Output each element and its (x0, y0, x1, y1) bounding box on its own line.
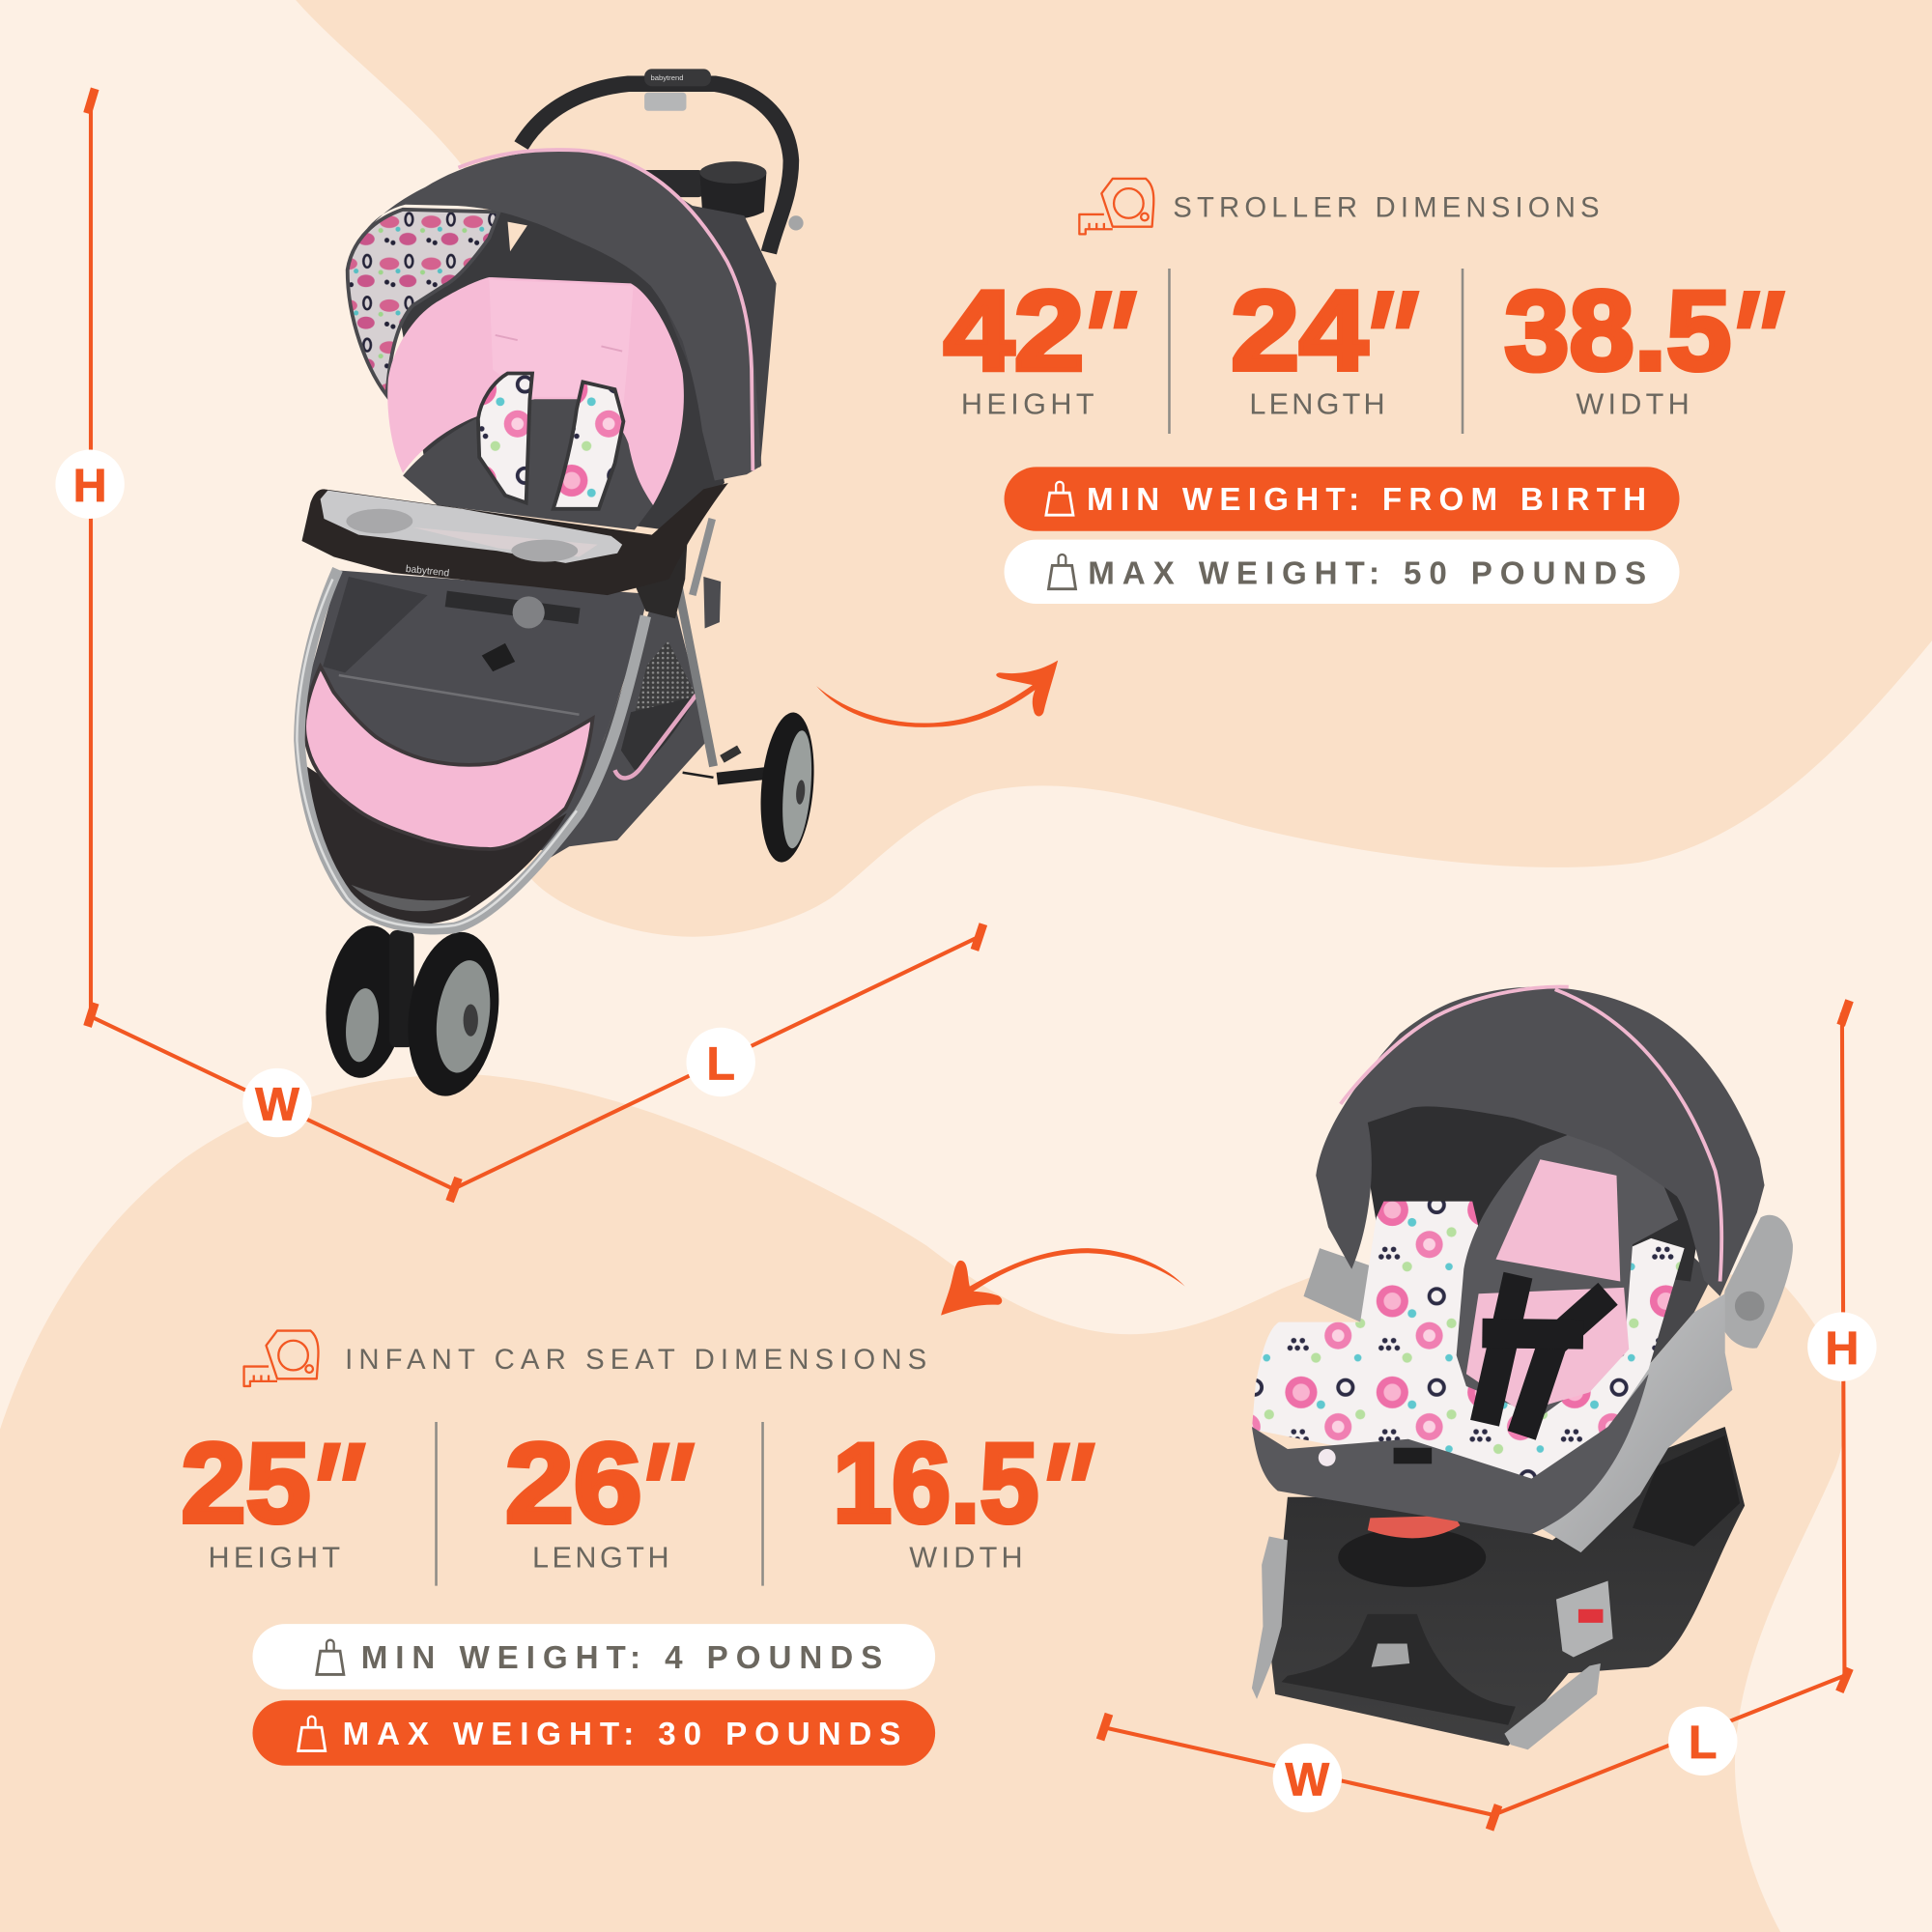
label: W: W (255, 1078, 299, 1130)
label: H (1807, 1312, 1877, 1381)
lower footwell lighter band (352, 885, 470, 911)
label: W (1273, 1744, 1342, 1812)
front gray cushion (1252, 1374, 1649, 1534)
canopy interior (1355, 1091, 1707, 1282)
stat: width: " (1705, 260, 1801, 424)
stat: height: 42 (944, 269, 1084, 394)
icon: tape measure (244, 1331, 319, 1386)
front wheels (319, 922, 509, 1102)
base (1271, 1427, 1745, 1746)
section: car seat dimensions (182, 1331, 1110, 1766)
stroller photo illustration (296, 69, 820, 1102)
left latch (1252, 1537, 1288, 1699)
floral seat liner (1252, 1202, 1685, 1485)
tray joint (635, 536, 688, 618)
stat: length: 24 (1231, 267, 1368, 394)
under-seat footwell (303, 764, 567, 924)
floral shoulder pad left (478, 373, 532, 502)
carrier silver side (1540, 1293, 1732, 1552)
stat: length: " (615, 1411, 710, 1577)
label: W (242, 1068, 312, 1137)
pill: maximum weight: MAX WEIGHT: 50 POUNDS (1088, 556, 1646, 592)
gray bolster (1457, 1133, 1678, 1417)
seat lower bucket (296, 571, 648, 850)
harness (1482, 1275, 1608, 1435)
pill: maximum weight (1005, 540, 1680, 604)
seat back dark (403, 397, 653, 529)
car seat canopy (1316, 987, 1765, 1296)
stroller dimension lines (55, 89, 983, 1202)
seat interior (401, 207, 724, 529)
rear wheel (755, 710, 820, 865)
tray (301, 483, 728, 595)
rear leg tube (676, 577, 714, 766)
pink seat back (1466, 1159, 1629, 1412)
pill: minimum weight (252, 1624, 935, 1690)
stat: height: HEIGHT (961, 388, 1094, 421)
canopy rear panel (640, 173, 777, 474)
pill: maximum weight (252, 1700, 935, 1766)
cup holder (639, 161, 766, 219)
pill: minimum weight (1005, 467, 1680, 531)
section: stroller dimensions (944, 179, 1801, 604)
carrier handle (1720, 1215, 1793, 1349)
stat: height: " (286, 1411, 381, 1577)
stat: width: 16.5 (833, 1420, 1038, 1547)
rear frame (683, 519, 773, 779)
seat pink padding (387, 277, 684, 505)
stat: width (833, 1411, 1110, 1577)
gap behind seat (508, 222, 527, 251)
label: L: L (706, 1037, 735, 1090)
label: L (1668, 1707, 1737, 1776)
carrier left arm (1303, 1248, 1380, 1322)
stat: length: " (1340, 260, 1435, 424)
stat: height: HEIGHT (209, 1541, 340, 1574)
floral shoulder pad right (554, 382, 623, 509)
stat: length: LENGTH (532, 1541, 669, 1574)
stat: length: LENGTH (1249, 388, 1385, 421)
stat: width: 38.5 (1504, 268, 1731, 394)
arrow: stroller to dimensions (816, 661, 1058, 727)
canopy underside (348, 210, 499, 395)
carrier dark shadow (1649, 1248, 1713, 1365)
label: L: L (1689, 1717, 1718, 1769)
arrow: car seat to dimensions (941, 1248, 1185, 1316)
car seat photo illustration (1252, 987, 1793, 1749)
label: W: W (1285, 1753, 1329, 1805)
stat: width: WIDTH (909, 1541, 1023, 1574)
stat: width (1504, 260, 1801, 424)
stat: length (505, 1411, 710, 1577)
handle: babytrend (650, 73, 683, 82)
stat: width: WIDTH (1576, 388, 1690, 421)
stat: height (944, 260, 1152, 424)
label: L (686, 1028, 755, 1096)
label: H: H (73, 460, 107, 512)
icon: tape measure (1079, 179, 1153, 234)
background blob: bottom (0, 1074, 1845, 1932)
silver front frame (297, 569, 645, 929)
stat: width: " (1015, 1411, 1110, 1577)
heading: INFANT CAR SEAT DIMENSIONS (345, 1344, 926, 1376)
pill: minimum weight: MIN WEIGHT: 4 POUNDS (361, 1640, 882, 1676)
stat: height (182, 1411, 381, 1577)
handle hub (1735, 1292, 1765, 1321)
heading: STROLLER DIMENSIONS (1173, 191, 1600, 223)
label: H: H (1825, 1322, 1859, 1375)
stat: length (1231, 260, 1435, 424)
label: H (55, 450, 125, 519)
belt buckle (1556, 1580, 1613, 1658)
base latch (1504, 1663, 1601, 1749)
canopy (349, 150, 761, 480)
pink footrest (304, 667, 593, 849)
pill: minimum weight: MIN WEIGHT: FROM BIRTH (1087, 482, 1646, 518)
pill: maximum weight: MAX WEIGHT: 30 POUNDS (343, 1717, 900, 1752)
stat: height: 25 (182, 1420, 310, 1547)
basket (542, 604, 708, 863)
car seat dimension lines (1100, 1001, 1877, 1830)
stat: length: 26 (505, 1419, 642, 1546)
tray: babytrend (405, 564, 450, 580)
handle (522, 69, 804, 252)
stat: height: " (1058, 260, 1152, 424)
background blob: top (296, 0, 1932, 937)
